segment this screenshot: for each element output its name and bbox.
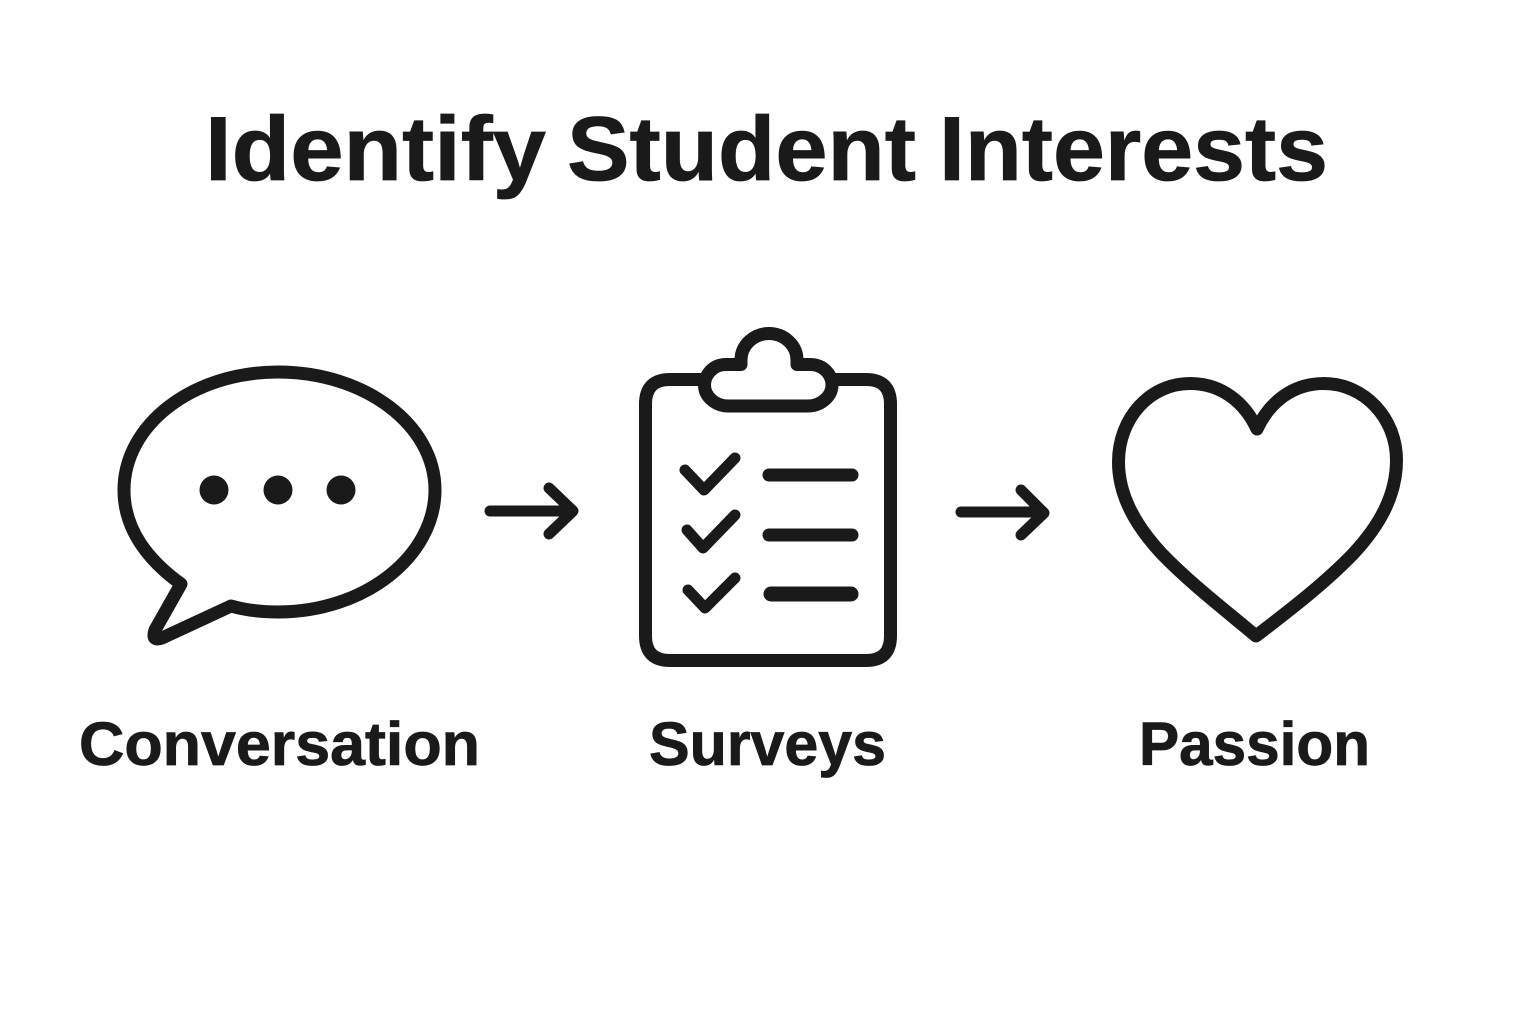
- arrow: conversation to surveys: [490, 488, 573, 534]
- icon: speech bubble: [124, 372, 435, 639]
- label: Surveys: Surveys: [649, 710, 886, 778]
- icon: heart: [1118, 384, 1396, 636]
- title: Student: [567, 99, 916, 200]
- title: [205, 99, 1328, 200]
- label: Conversation: Conversation: [79, 710, 480, 778]
- arrow: surveys to passion: [961, 490, 1044, 535]
- title: Interests: [939, 99, 1328, 200]
- label: Passion: Passion: [1139, 710, 1370, 778]
- icon: clipboard checklist: [646, 334, 890, 660]
- title: Identify: [205, 99, 546, 200]
